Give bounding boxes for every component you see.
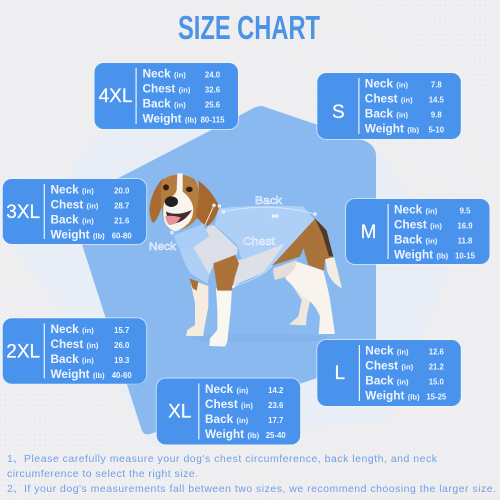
card: L: 15-25 (426, 392, 447, 402)
head white blaze and muzzle (163, 173, 193, 231)
card: M: 11.8 (458, 236, 473, 246)
card: XL: Weight (lb) (205, 427, 260, 441)
card: 3XL (2, 178, 147, 245)
card: 4XL: Neck (in) (142, 66, 186, 80)
card: L: Weight (lb) (365, 388, 420, 402)
card: 2XL (2, 317, 147, 384)
card: M (345, 198, 490, 265)
card: L: 12.6 (429, 348, 445, 356)
dog shadow (190, 334, 330, 343)
card: S: Weight (lb) (365, 122, 419, 136)
card: 3XL: 28.7 (114, 202, 129, 210)
far shoulder (189, 278, 198, 291)
label: Back: Back (255, 195, 283, 207)
card: XL: Back (in) (205, 412, 249, 426)
card: 4XL: 25.6 (205, 100, 221, 110)
far hind leg (287, 277, 312, 325)
saddle marking (315, 218, 333, 257)
card: L: Back (in) (365, 374, 409, 388)
card: L: 21.2 (429, 362, 445, 372)
card: 3XL: Back (in) (50, 212, 94, 226)
card: M: Back (in) (394, 232, 438, 246)
notes: 2、 (7, 483, 23, 495)
card: 3XL: 20.0 (114, 186, 130, 196)
card: L: L (335, 363, 345, 384)
card: 2XL: Chest (in) (50, 337, 99, 351)
card: 2XL: 26.0 (114, 341, 130, 350)
card: L (316, 339, 462, 407)
card: 4XL: Chest (in) (142, 82, 191, 96)
card: L: Chest (in) (365, 358, 414, 372)
card: 2XL: 15.7 (114, 326, 129, 335)
near front leg (209, 288, 232, 347)
card: XL: 25-40 (266, 431, 286, 440)
card: 2XL: Back (in) (50, 352, 94, 366)
card: 4XL: 4XL (99, 86, 132, 107)
mouth (166, 210, 192, 223)
card: XL (156, 378, 301, 446)
vest grey belly panel (230, 243, 287, 287)
label: Chest: Chest (243, 236, 275, 248)
card: S: 7.8 (431, 80, 442, 90)
ear left (149, 178, 163, 223)
measure points (171, 204, 316, 288)
near shoulder (213, 255, 239, 291)
ear right (196, 181, 219, 226)
card: M: Neck (in) (394, 202, 438, 216)
measure line: back (223, 207, 315, 214)
card: S: 9.8 (431, 110, 442, 120)
card: XL: Chest (in) (205, 397, 253, 411)
background pentagon: pale outer (16, 112, 455, 445)
vest chest panel (179, 247, 209, 284)
eye right (186, 187, 193, 192)
measure line: chest (233, 266, 272, 287)
card: 4XL: 32.6 (205, 86, 221, 94)
card: XL: 14.2 (268, 386, 284, 395)
card: 2XL: 2XL (6, 341, 40, 362)
card: M: 16.9 (457, 222, 473, 230)
card: 4XL: Weight (lb) (142, 112, 197, 126)
card: S: 5-10 (428, 126, 445, 134)
vest collar (173, 224, 209, 247)
card: S: S (332, 102, 345, 123)
notes: If your dog's measurements fall between two sizes, we recommend choosing the larger size. (24, 483, 496, 495)
tail (325, 258, 342, 288)
title: SIZE CHART (178, 9, 320, 46)
card: 2XL: Neck (in) (50, 322, 94, 336)
card: S: Back (in) (365, 106, 409, 120)
background pentagon: blue inner (69, 106, 376, 434)
hindquarters (272, 218, 333, 271)
card: 3XL: Chest (in) (50, 198, 99, 212)
near hind leg (285, 262, 335, 334)
card: 3XL: 21.6 (114, 216, 130, 226)
card: 2XL: 19.3 (114, 356, 130, 365)
card: S: Neck (in) (365, 76, 409, 90)
nose (165, 196, 178, 207)
card: M: Chest (in) (394, 218, 442, 232)
notes: 1、 (7, 453, 23, 465)
card: 3XL: 60-80 (112, 232, 132, 240)
card: S: 14.5 (429, 96, 445, 104)
card: M: 10-15 (455, 252, 476, 260)
card: 4XL: Back (in) (142, 96, 186, 110)
card: 3XL: Neck (in) (50, 182, 94, 196)
measure line: neck (205, 205, 214, 225)
card: 2XL: Weight (lb) (50, 367, 105, 381)
card: S: Chest (in) (365, 92, 413, 106)
card: XL: 17.7 (268, 416, 283, 425)
card: M: M (361, 222, 376, 243)
head (161, 174, 199, 231)
card: 4XL: 80-115 (201, 116, 225, 124)
card: XL: XL (168, 402, 191, 422)
tongue (165, 216, 181, 225)
notes (7, 453, 496, 495)
notes: Please carefully measure your dog's chest circumference, back length, and neck (24, 453, 438, 465)
vest back panel (215, 206, 314, 273)
card: S (316, 72, 462, 140)
card: 4XL: 24.0 (205, 70, 221, 80)
far front leg (186, 279, 208, 336)
card: 4XL (94, 62, 239, 130)
dog with vest (149, 173, 342, 347)
card: XL: 23.6 (268, 401, 284, 410)
label: Neck: Neck (149, 241, 177, 253)
belly (273, 260, 297, 280)
card: L: Neck (in) (365, 344, 409, 358)
vest grey shoulder panel (193, 225, 237, 275)
card: L: 15.0 (429, 378, 445, 386)
card: 3XL: 3XL (6, 202, 40, 223)
card: M: Weight (lb) (394, 248, 449, 262)
card: 3XL: Weight (lb) (50, 228, 105, 242)
card: XL: Neck (in) (205, 382, 249, 396)
eye left (163, 184, 169, 190)
card: 2XL: 40-60 (112, 371, 132, 380)
notes: circumference to select the right size. (7, 468, 198, 480)
card: M: 9.5 (460, 206, 471, 216)
